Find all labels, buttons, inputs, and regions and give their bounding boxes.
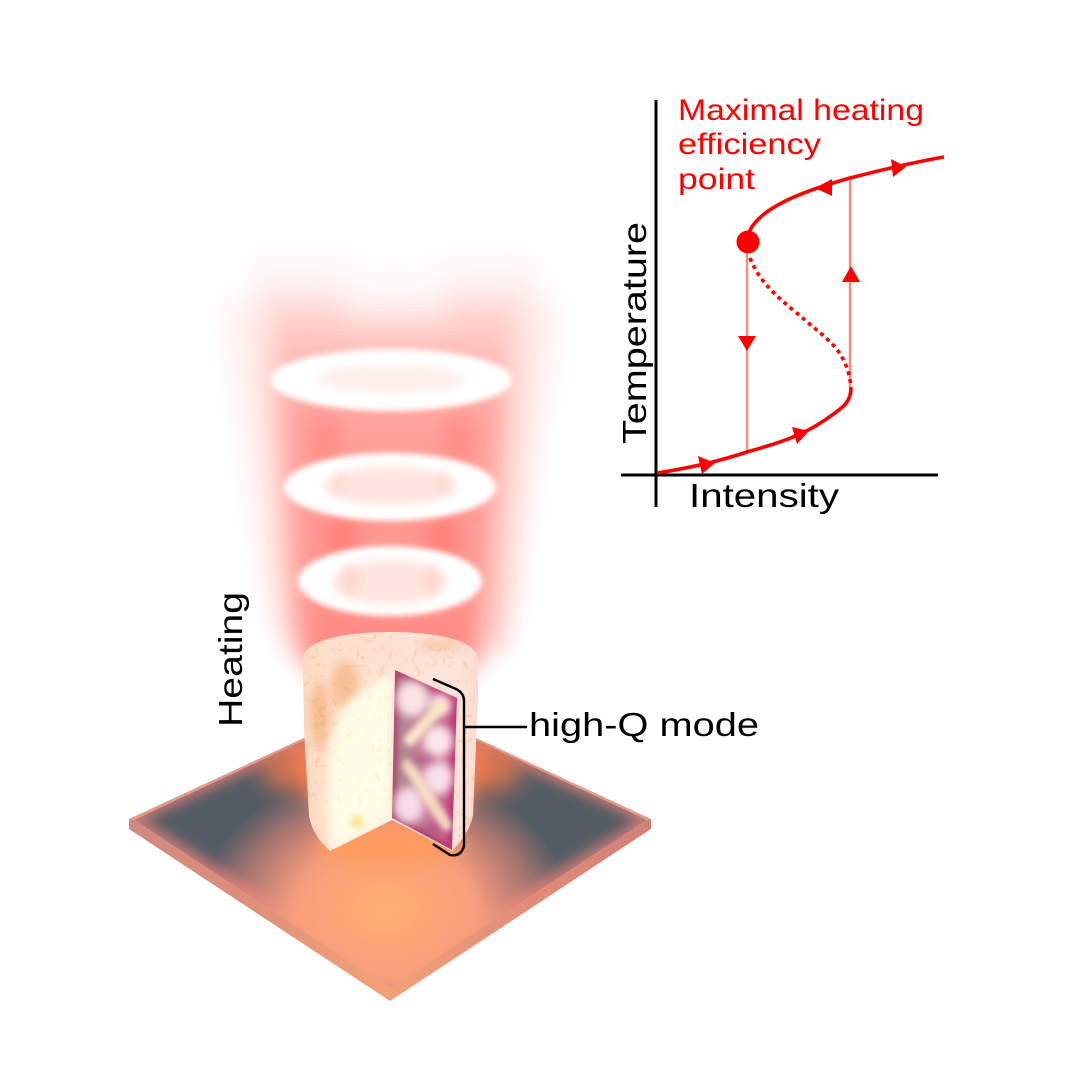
high-Q mode bracket and leader	[433, 679, 527, 855]
panel: substrate plate	[129, 738, 651, 1001]
glow: pale outer cone	[250, 250, 540, 650]
axis label: Temperature: Temperature	[616, 222, 653, 444]
plate top surface	[134, 740, 647, 988]
direction arrows	[698, 159, 906, 474]
ring: middle wave front	[284, 453, 496, 521]
panel: resonator cylinder	[303, 632, 478, 851]
mode dark nodes	[408, 756, 440, 837]
annotation: maximal heating efficiency point: efficiency	[678, 128, 821, 161]
upper stable branch	[749, 157, 944, 232]
x and y axes	[621, 100, 938, 507]
cylinder vein texture	[303, 632, 478, 850]
plate right edge	[390, 819, 651, 1001]
glow: lighter upper centre	[345, 225, 445, 320]
ring: top wave front	[270, 349, 512, 411]
lower stable branch	[657, 388, 851, 473]
cylinder outer body	[303, 632, 478, 851]
ring: lower wave front	[298, 546, 482, 616]
mode hotspots	[394, 681, 453, 823]
label: high-Q mode: high-Q mode	[529, 706, 759, 743]
label: Heating: Heating	[212, 592, 249, 727]
annotation: maximal heating efficiency point: point	[678, 163, 756, 196]
cut face: bright left wall	[328, 672, 392, 850]
glow: red inner cone	[272, 300, 514, 670]
thin transition line: heating jump	[849, 180, 851, 390]
panel: emitted heat wave column	[225, 225, 560, 670]
chart: temperature vs intensity bistability	[616, 94, 944, 514]
glow: faint wide halo	[225, 300, 560, 620]
annotation: maximal heating efficiency point: Maximal heating	[678, 94, 924, 127]
thin transition line: cooling jump	[746, 250, 748, 452]
unstable dotted branch	[750, 258, 851, 388]
axis label: Intensity: Intensity	[689, 477, 840, 514]
maximal heating efficiency point	[736, 230, 760, 254]
glow: right lobes	[428, 414, 472, 559]
plate back rim	[129, 698, 651, 820]
glow: left lobes	[312, 414, 356, 559]
cut face: mode pattern wall	[392, 670, 457, 850]
mode stripes	[408, 706, 446, 825]
plate left edge	[129, 819, 390, 1001]
